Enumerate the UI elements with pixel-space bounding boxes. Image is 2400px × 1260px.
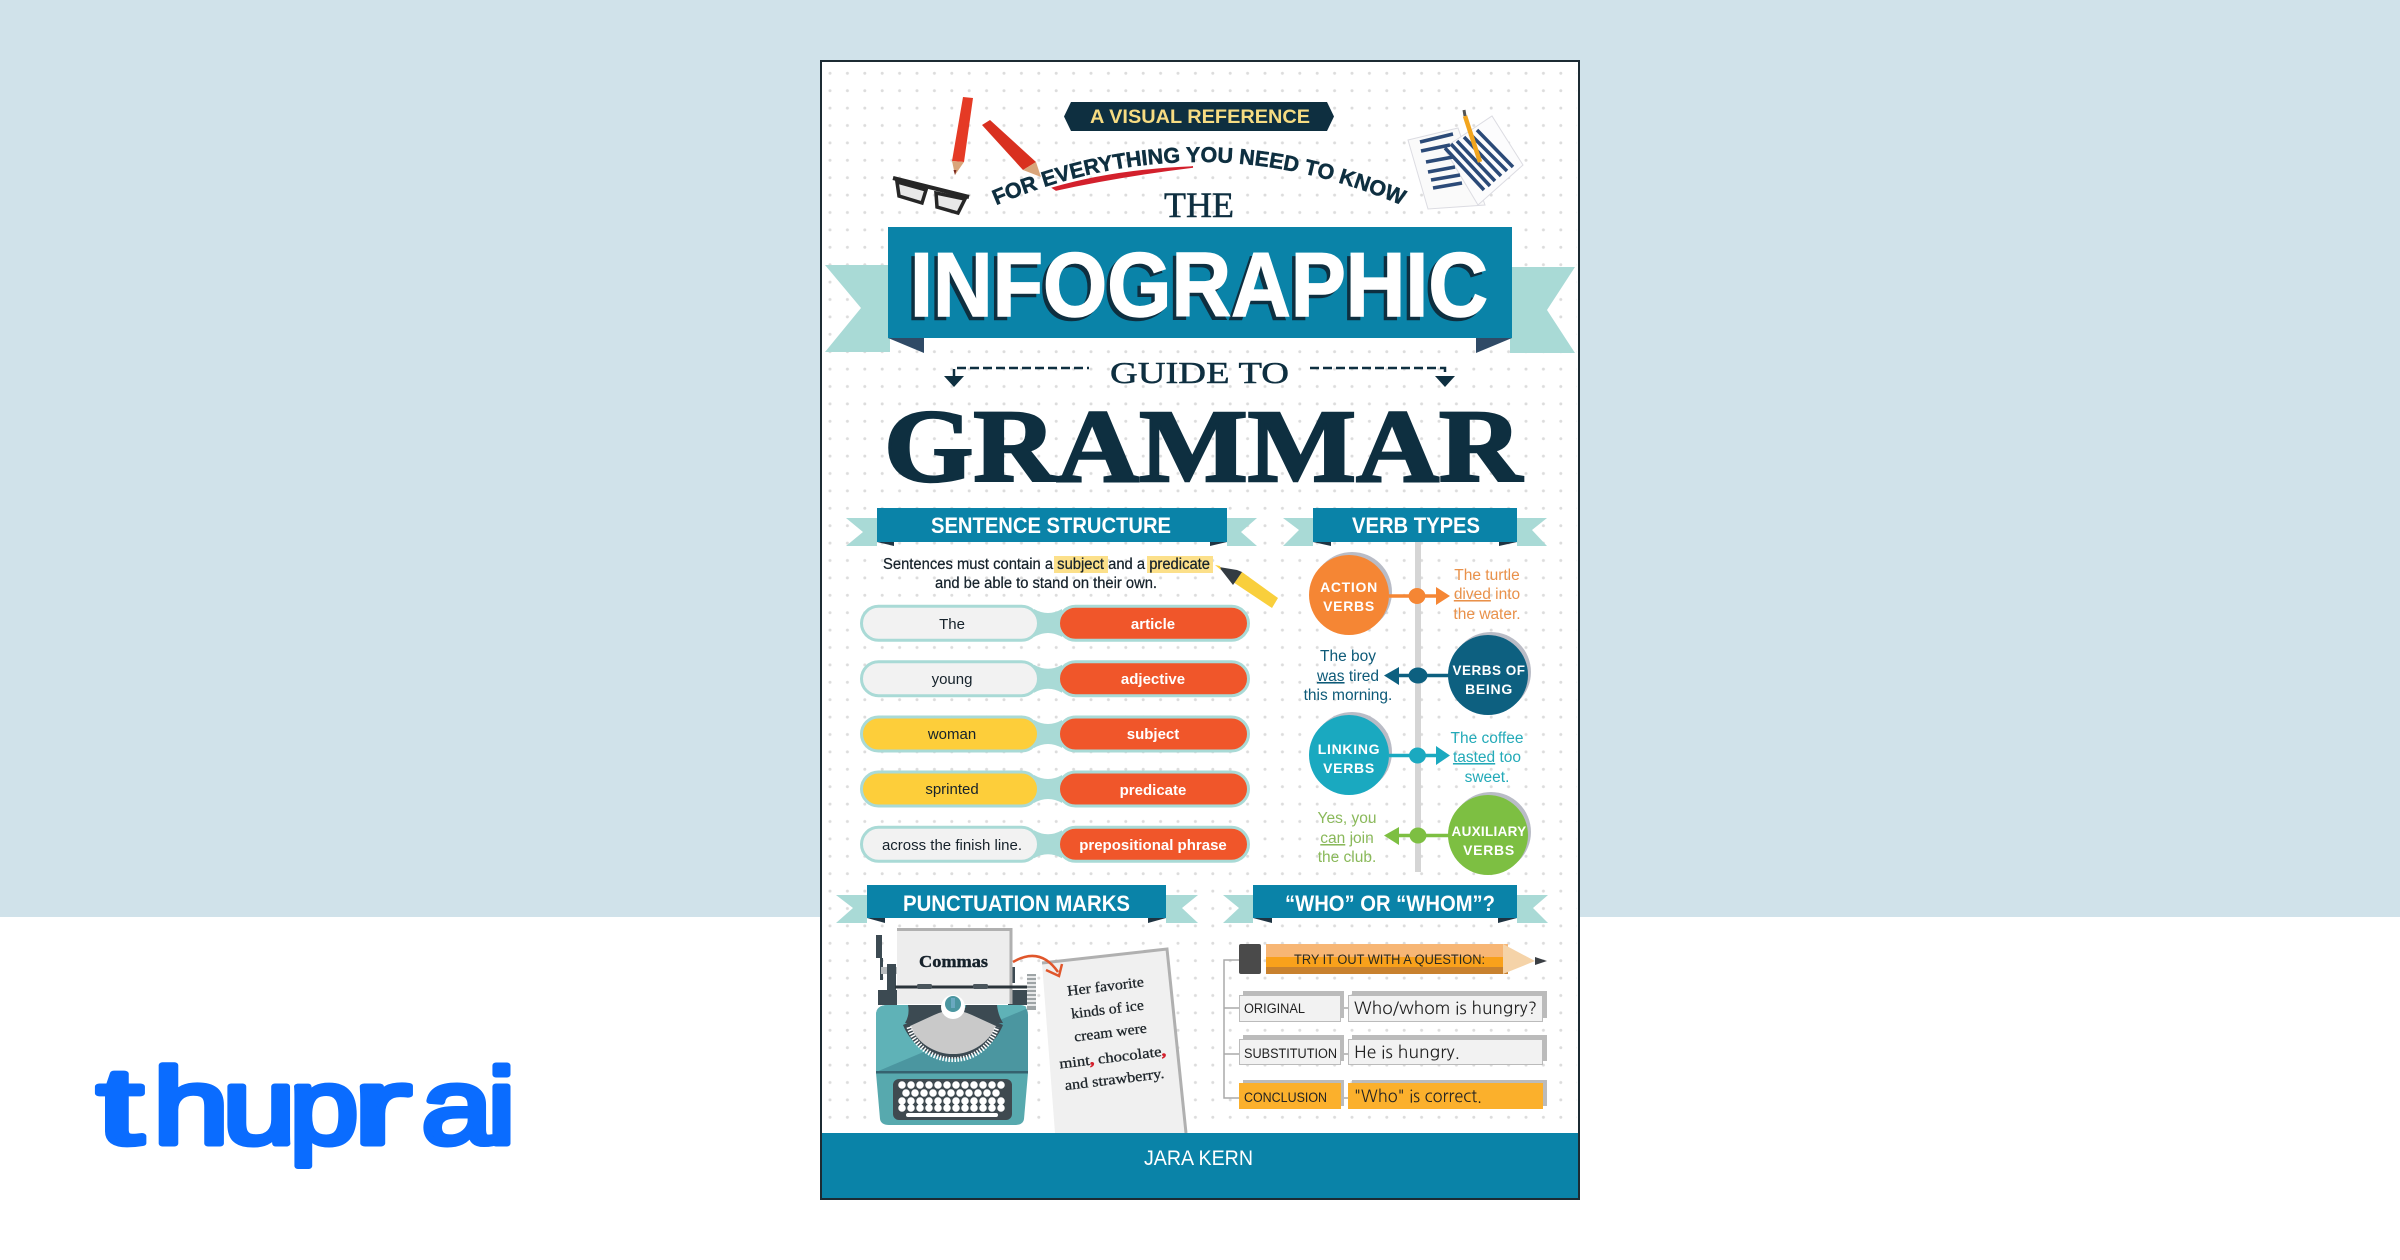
main ribbon with title xyxy=(825,227,1575,353)
icon: glasses xyxy=(893,178,969,213)
logo: thuprai: r xyxy=(353,1046,411,1166)
typewriter body xyxy=(876,1005,1028,1072)
typewriter mechanism xyxy=(876,935,1028,1005)
connector lines xyxy=(1224,960,1348,1098)
background: upper blue band xyxy=(0,0,2400,917)
row: sprinted / predicate: predicate xyxy=(1120,782,1186,799)
verb type: auxiliary verbs xyxy=(1318,792,1531,875)
verb type: auxiliary verbs: the club. xyxy=(1318,849,1376,866)
verb type: linking verbs: The coffee xyxy=(1451,730,1523,747)
logo: thuprai: h xyxy=(153,1046,229,1166)
pencil banner: TRY IT OUT WITH A QUESTION: xyxy=(1294,952,1485,967)
note sheet with example sentence: and strawberry. xyxy=(1064,1066,1165,1094)
panel: sentence structure xyxy=(846,508,1278,861)
verb type: auxiliary verbs: can join xyxy=(1320,830,1374,847)
logo: thuprai: u xyxy=(222,1046,296,1166)
icon: highlighter marker xyxy=(1215,565,1278,608)
badge: a visual reference: A VISUAL REFERENCE xyxy=(1090,107,1310,128)
verb type: action verbs: dived into xyxy=(1454,586,1520,603)
row: across the finish line / prepositional phrase: prepositional phrase xyxy=(1079,837,1227,854)
verb type: verbs of being xyxy=(1304,632,1531,715)
section ribbon: punctuation marks xyxy=(836,885,1198,923)
panel: who or whom xyxy=(1223,885,1548,1109)
verb type: action verbs: VERBS xyxy=(1323,598,1375,614)
row: woman / subject: subject xyxy=(1127,726,1179,743)
verb type: action verbs xyxy=(1309,552,1521,635)
footer band with author: JARA KERN xyxy=(1144,1147,1253,1170)
verb type: linking verbs: sweet. xyxy=(1465,769,1509,786)
row: young / adjective xyxy=(862,662,1248,696)
heading word: the: THE xyxy=(1164,185,1234,225)
logo: thuprai: p xyxy=(290,1046,358,1166)
red underline stroke xyxy=(1053,167,1193,190)
row: woman / subject xyxy=(862,717,1248,751)
verb type: linking verbs: VERBS xyxy=(1323,760,1375,776)
verb type: action verbs: ACTION xyxy=(1320,579,1378,595)
row: original: ORIGINAL xyxy=(1244,1001,1305,1016)
verb type: auxiliary verbs: Yes, you xyxy=(1318,810,1376,827)
icon: typewriter xyxy=(876,929,1036,1125)
typewriter keyboard xyxy=(893,1079,1012,1120)
row: original xyxy=(1240,991,1547,1022)
pencil banner xyxy=(1239,944,1547,974)
section ribbon: who or whom xyxy=(1223,885,1548,923)
row: original: Who/whom is hungry? xyxy=(1354,1000,1537,1017)
section ribbon: sentence structure: SENTENCE STRUCTURE xyxy=(931,513,1171,538)
row: conclusion: CONCLUSION xyxy=(1244,1090,1327,1105)
badge: a visual reference xyxy=(1064,102,1334,131)
row: conclusion xyxy=(1239,1080,1547,1109)
section ribbon: verb types xyxy=(1283,508,1547,546)
intro text with highlights: Sentences must contain a subject and a predicate xyxy=(883,556,1210,573)
footer band with author xyxy=(822,1133,1578,1198)
intro text with highlights: and be able to stand on their own. xyxy=(935,575,1157,592)
section ribbon: verb types: VERB TYPES xyxy=(1352,513,1480,538)
verb type: linking verbs xyxy=(1309,712,1523,795)
icon: red pencil two xyxy=(982,120,1041,177)
section ribbon: who or whom: “WHO” OR “WHOM”? xyxy=(1285,891,1495,916)
row: the / article xyxy=(862,606,1248,640)
curved arrow to note xyxy=(1013,956,1062,976)
verb type: verbs of being: BEING xyxy=(1465,681,1513,697)
section ribbon: punctuation marks: PUNCTUATION MARKS xyxy=(903,891,1130,916)
row: young / adjective: adjective xyxy=(1121,671,1185,688)
verb type: auxiliary verbs: AUXILIARY xyxy=(1452,824,1526,839)
title shadow: INFOGRAPHIC xyxy=(906,238,1484,340)
verb type: verbs of being: was tired xyxy=(1317,668,1379,685)
row: sprinted / predicate xyxy=(862,772,1248,806)
verb type: linking verbs: tasted too xyxy=(1453,749,1521,766)
verb type: action verbs: The turtle xyxy=(1454,567,1520,584)
logo: thuprai: t xyxy=(97,1046,143,1166)
note sheet with example sentence: kinds of ice xyxy=(1070,998,1145,1022)
logo: thuprai: i xyxy=(488,1046,516,1166)
verb type: verbs of being: The boy xyxy=(1320,648,1376,665)
row: substitution xyxy=(1240,1035,1547,1064)
verb type: verbs of being: VERBS OF xyxy=(1452,663,1526,678)
curved subtitle: FOR EVERYTHING YOU NEED TO KNOW xyxy=(992,146,1408,205)
row: young / adjective: young xyxy=(932,671,972,688)
row: woman / subject: woman xyxy=(927,726,976,743)
row: the / article: article xyxy=(1131,616,1175,633)
row: substitution: He is hungry. xyxy=(1354,1044,1460,1061)
row: sprinted / predicate: sprinted xyxy=(925,781,979,798)
verb type: verbs of being: this morning. xyxy=(1304,687,1392,704)
row: conclusion: "Who" is correct. xyxy=(1354,1088,1482,1105)
logo: thuprai xyxy=(97,1046,516,1166)
note sheet with example sentence xyxy=(1042,949,1186,1133)
row: across the finish line / prepositional phrase: across the finish line. xyxy=(882,837,1022,854)
row: substitution: SUBSTITUTION xyxy=(1244,1046,1337,1061)
title: infographic: INFOGRAPHIC xyxy=(910,235,1488,336)
icon: papers and orange pencil xyxy=(1408,110,1523,209)
typewriter sheet with title: Commas xyxy=(919,952,988,971)
cover page with dot grid xyxy=(821,61,1579,1199)
row: across the finish line / prepositional phrase xyxy=(862,827,1248,861)
panel: punctuation marks xyxy=(836,885,1198,1133)
verb type: linking verbs: LINKING xyxy=(1318,741,1380,757)
verb type: action verbs: the water. xyxy=(1453,606,1521,623)
section ribbon: sentence structure xyxy=(846,508,1257,546)
book cover xyxy=(820,60,1580,1200)
timeline axis xyxy=(1415,542,1421,872)
intro text with highlights xyxy=(883,556,1213,592)
panel: verb types xyxy=(1283,508,1547,875)
typewriter sheet with title xyxy=(897,929,1011,1004)
note sheet with example sentence: Her favorite xyxy=(1066,974,1145,1000)
verb type: auxiliary verbs: VERBS xyxy=(1463,842,1515,858)
note sheet with example sentence: cream were xyxy=(1073,1021,1148,1045)
heading word: guide to with arrows xyxy=(944,355,1455,390)
note sheet with example sentence: mint, chocolate , xyxy=(1058,1044,1167,1072)
logo: thuprai: a xyxy=(422,1046,494,1166)
icon: red pencil one xyxy=(952,97,973,175)
heading word: grammar: GRAMMAR xyxy=(884,389,1524,504)
row: the / article: The xyxy=(939,616,965,633)
heading word: guide to with arrows: GUIDE TO xyxy=(1110,355,1289,390)
